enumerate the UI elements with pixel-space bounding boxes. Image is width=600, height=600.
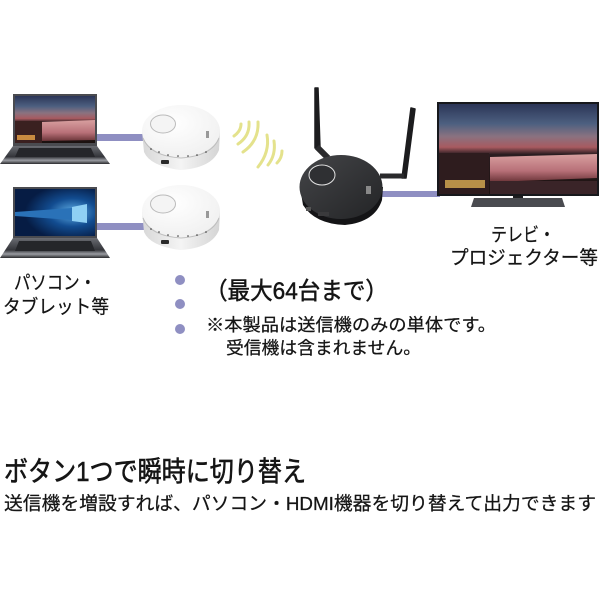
subheading: 送信機を増設すれば、パソコン・HDMI機器を切り替えて出力できます xyxy=(4,493,596,514)
heading: ボタン1つで瞬時に切り替え xyxy=(4,456,306,487)
icon: wireless signal waves xyxy=(234,122,282,167)
text: up to 64 units: （最大64台まで） xyxy=(205,278,388,305)
icon: TV with sunset waterfall xyxy=(437,102,599,207)
bullets xyxy=(175,275,185,334)
icon: laptop with sunset waterfall xyxy=(0,94,110,164)
icon: black receiver with antennas xyxy=(300,88,415,225)
connector: receiver to TV xyxy=(380,191,440,197)
label: TV / projector: プロジェクター等 xyxy=(450,247,598,269)
icon: white transmitter 1 xyxy=(142,105,220,170)
note: transmitter only: ※本製品は送信機のみの単体です。 xyxy=(206,315,496,335)
connector: laptop 2 to transmitter xyxy=(96,223,146,230)
note: transmitter only xyxy=(206,315,496,358)
label: TV / projector: テレビ・ xyxy=(491,224,555,246)
note: transmitter only: 受信機は含まれません。 xyxy=(226,338,421,358)
connector: laptop 1 to transmitter xyxy=(96,134,146,141)
label: PC / tablet: パソコン・ xyxy=(14,273,96,294)
label: PC / tablet xyxy=(3,273,109,318)
icon: white transmitter 2 xyxy=(142,185,220,250)
label: TV / projector xyxy=(450,224,598,269)
icon: laptop with Windows desktop xyxy=(0,187,110,258)
label: PC / tablet: タブレット等 xyxy=(3,295,109,318)
